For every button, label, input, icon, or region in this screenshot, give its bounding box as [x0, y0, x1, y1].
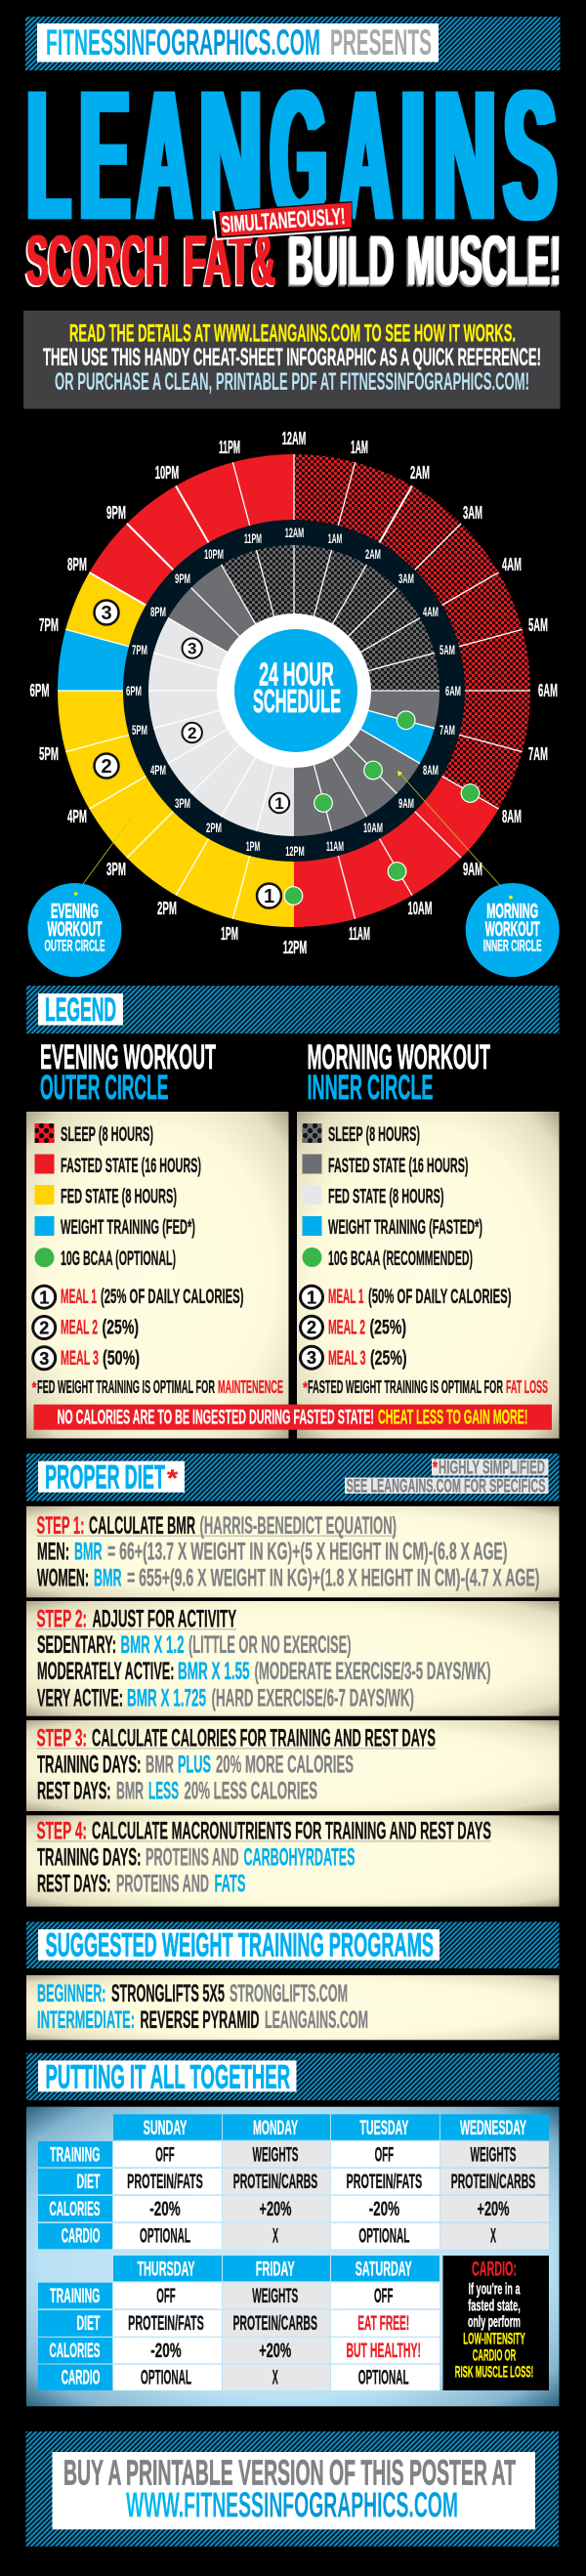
title: Leangains [27, 52, 557, 259]
table: sunday to wednesday: TRAINING [50, 2143, 100, 2166]
outer hour labels: 11AM [349, 924, 370, 944]
legend titles: OUTER CIRCLE [40, 1069, 168, 1107]
meal markers [94, 600, 289, 908]
outer hour labels: 12AM [282, 429, 306, 448]
inner hour labels: 4AM [423, 604, 439, 619]
panel: evening legend: (25%) [102, 1315, 139, 1338]
panel: step 2: MODERATELY ACTIVE: [37, 1658, 174, 1685]
callout: cardio warning: CARDIO OR [473, 2345, 516, 2364]
panel: step 1: MEN: [37, 1539, 69, 1566]
panel: step 3: STEP 3: [37, 1724, 87, 1752]
table: thursday to saturday: DIET [76, 2312, 101, 2335]
table: sunday to wednesday: PROTEIN/CARBS [233, 2171, 317, 2193]
panel: programs [26, 1975, 559, 2040]
outer hour labels: 6PM [29, 681, 49, 700]
table: sunday to wednesday: WEIGHTS [471, 2143, 516, 2166]
table: thursday to saturday: BUT HEALTHY! [346, 2340, 421, 2362]
inner hour labels: 10PM [204, 546, 224, 562]
outer hour labels: 4PM [67, 807, 87, 826]
inner hour labels: 1AM [328, 530, 342, 546]
panel: step 2: STEP 2: [37, 1605, 87, 1632]
outer hour labels: 8AM [502, 807, 522, 826]
panel: morning legend: (25%) [370, 1346, 406, 1370]
inner hour labels: 4PM [150, 762, 166, 778]
panel: morning legend: 2 [307, 1318, 316, 1337]
panel: step 3: BMR [146, 1751, 174, 1778]
callout: cardio warning: fasted state, [468, 2297, 521, 2315]
inner hour labels: 10AM [363, 820, 383, 835]
panel: step 1: BMR [74, 1539, 102, 1566]
table: thursday to saturday: OPTIONAL [358, 2366, 409, 2388]
panel: evening legend: MEAL 3 [61, 1346, 99, 1370]
table: thursday to saturday: SATURDAY [356, 2258, 412, 2280]
panel: evening legend: 3 [39, 1349, 49, 1369]
center badge: 24 hour schedule [217, 613, 371, 768]
table: sunday to wednesday: +20% [260, 2198, 292, 2220]
table: thursday to saturday: EAT FREE! [357, 2312, 409, 2335]
inner ring: morning workout [148, 545, 440, 836]
inner hour labels: 12PM [285, 843, 305, 859]
table: sunday to wednesday: -20% [369, 2198, 399, 2220]
panel: evening legend: 1 [39, 1288, 49, 1307]
table: sunday to wednesday: -20% [149, 2198, 181, 2220]
panel: step 3: REST DAYS: [37, 1778, 111, 1805]
outer hour labels: 9PM [106, 503, 126, 523]
inner hour labels: 5AM [440, 642, 455, 657]
title: Leangains: G [271, 52, 327, 259]
heading: putting it all together [26, 2053, 559, 2100]
panel: morning legend: 3 [307, 1348, 316, 1368]
callout: evening workout: WORKOUT [47, 918, 103, 941]
callout: cardio warning: If you're in a [469, 2280, 521, 2299]
table: thursday to saturday: X [272, 2366, 278, 2388]
subtitle: scorch fat and build muscle: SCORCH [25, 225, 168, 303]
panel: step 2 [26, 1601, 559, 1716]
panel: morning legend: SLEEP (8 HOURS) [328, 1122, 420, 1146]
panel: programs: BEGINNER: [37, 1980, 105, 2007]
dark ring [122, 519, 466, 863]
table: thursday to saturday: FRIDAY [256, 2258, 295, 2280]
outer hour labels: 9AM [463, 860, 482, 879]
subtitle: scorch fat and build muscle: FAT [182, 225, 251, 303]
inner hour labels: 11AM [326, 838, 344, 854]
table: sunday to wednesday [38, 2114, 549, 2249]
panel: evening legend: * [31, 1378, 37, 1397]
panel: step 1: CALCULATE BMR [89, 1512, 195, 1540]
table: sunday to wednesday: CALORIES [49, 2198, 100, 2220]
center badge: 24 hour schedule: 24 HOUR [259, 656, 334, 692]
title: Leangains: A [339, 52, 392, 259]
outer hour labels: 2PM [157, 899, 177, 918]
panel: evening legend: FED WEIGHT TRAINING IS OPTIMAL FOR [37, 1377, 215, 1397]
panel: programs: LEANGAINS.COM [265, 2006, 368, 2034]
panel: step 4: PROTEINS AND [116, 1871, 209, 1898]
subtitle: scorch fat and build muscle [25, 223, 562, 303]
outer hour labels: 4AM [502, 555, 522, 574]
panel: programs: STRONGLIFTS 5X5 [111, 1980, 225, 2007]
inner hour labels: 3PM [175, 795, 190, 811]
heading: proper diet: * [433, 1457, 438, 1477]
legend titles: INNER CIRCLE [307, 1069, 434, 1107]
outer hour labels: 7AM [528, 744, 548, 764]
panel: evening legend: FASTED STATE (16 HOURS) [61, 1154, 201, 1177]
inner hour labels: 6AM [445, 683, 461, 698]
panel: morning legend: MEAL 1 [328, 1285, 364, 1308]
table: sunday to wednesday: MONDAY [253, 2117, 298, 2139]
arrow: morning callout [398, 771, 513, 899]
panel: step 1: STEP 1: [37, 1512, 84, 1540]
table: thursday to saturday: -20% [150, 2340, 182, 2362]
intro box [23, 311, 561, 408]
inner hour labels: 1PM [246, 838, 260, 854]
panel: step 3: TRAINING DAYS: [37, 1751, 141, 1778]
panel: step 2: SEDENTARY: [37, 1631, 116, 1659]
outer hour labels: 1AM [351, 438, 368, 457]
table: thursday to saturday: PROTEIN/CARBS [232, 2312, 317, 2335]
panel: step 1: WOMEN: [37, 1565, 89, 1592]
arrow: evening callout [74, 819, 131, 896]
subtitle: scorch fat and build muscle: FAT [184, 223, 252, 301]
badge: simultaneously [213, 201, 353, 240]
panel: step 3: 20% MORE CALORIES [216, 1751, 354, 1778]
table: sunday to wednesday: X [272, 2224, 278, 2247]
panel: step 2: BMR X 1.2 [121, 1631, 184, 1659]
panel: evening legend: MEAL 2 [61, 1315, 98, 1338]
footer call to action [25, 2431, 559, 2547]
table: thursday to saturday: TRAINING [50, 2285, 100, 2307]
inner hour labels: 2AM [365, 546, 381, 562]
table: thursday to saturday: THURSDAY [137, 2258, 195, 2280]
table: thursday to saturday [38, 2256, 440, 2390]
title: Leangains: I [400, 52, 426, 259]
inner hour labels: 2PM [206, 820, 222, 835]
panel: step 1: (HARRIS-BENEDICT EQUATION) [199, 1512, 397, 1540]
panel: morning legend: MEAL 2 [328, 1315, 365, 1338]
panel: step 4: REST DAYS: [37, 1871, 111, 1898]
outer hour labels: 11PM [219, 438, 240, 457]
table: sunday to wednesday: OPTIONAL [358, 2224, 409, 2247]
table: thursday to saturday: OFF [156, 2285, 176, 2307]
outer hour labels: 10AM [408, 899, 432, 918]
outer hour labels: 1PM [221, 924, 238, 944]
panel: morning legend: 1 [307, 1288, 316, 1307]
panel: step 3: 20% LESS CALORIES [184, 1778, 317, 1805]
panel: step 4: STEP 4: [37, 1817, 87, 1844]
outer hour labels: 8PM [67, 555, 87, 574]
meal markers: 3 [101, 603, 112, 624]
meal markers: 3 [188, 640, 196, 658]
panel: programs: REVERSE PYRAMID [141, 2006, 260, 2034]
panel: step 4: TRAINING DAYS: [37, 1844, 141, 1872]
panel: evening legend: SLEEP (8 HOURS) [61, 1122, 153, 1146]
callout: cardio warning: only perform [468, 2312, 521, 2331]
outer hour labels: 6AM [538, 681, 558, 700]
table: thursday to saturday: OPTIONAL [141, 2366, 191, 2388]
heading: proper diet [26, 1454, 559, 1500]
inner hour labels: 9AM [398, 795, 414, 811]
subtitle: scorch fat and build muscle: SCORCH [26, 223, 169, 301]
table: sunday to wednesday: SUNDAY [144, 2117, 187, 2139]
table: thursday to saturday: WEIGHTS [252, 2285, 298, 2307]
outer ring: evening workout [58, 454, 530, 927]
legend titles: EVENING WORKOUT [40, 1038, 216, 1077]
panel: evening legend: 2 [39, 1319, 49, 1338]
panel: step 2: (LITTLE OR NO EXERCISE) [188, 1631, 352, 1659]
table: sunday to wednesday: OFF [375, 2143, 394, 2166]
inner hour labels: 8PM [150, 604, 166, 619]
heading: proper diet: PROPER DIET [45, 1459, 165, 1497]
outer hour labels: 3AM [463, 503, 482, 523]
panel: step 2: BMR X 1.55 [178, 1658, 250, 1685]
table: sunday to wednesday: WEIGHTS [252, 2143, 299, 2166]
subtitle: scorch fat and build muscle: BUILD [287, 225, 393, 303]
heading: proper diet: * [167, 1465, 179, 1492]
title: Leangains: N [434, 52, 496, 259]
meal markers: 1 [264, 886, 274, 908]
panel: step 2: VERY ACTIVE: [37, 1685, 123, 1712]
panel: step 1 [26, 1506, 559, 1597]
table: thursday to saturday: CALORIES [49, 2340, 100, 2362]
panel: step 2: (HARD EXERCISE/6-7 DAYS/WK) [211, 1685, 414, 1712]
panel: step 3: BMR [116, 1778, 144, 1805]
title: Leangains: E [80, 52, 130, 259]
table: sunday to wednesday: +20% [477, 2198, 510, 2220]
outer hour labels [29, 429, 558, 957]
subtitle: scorch fat and build muscle: & [252, 223, 275, 301]
panel: evening legend: (50%) [103, 1346, 140, 1370]
panel: step 4 [26, 1815, 559, 1907]
panel: step 1: BMR [94, 1565, 121, 1592]
heading: legend [26, 986, 559, 1034]
inner hour labels: 9PM [175, 570, 190, 586]
panel: weekly table [26, 2107, 559, 2406]
table: thursday to saturday: OFF [374, 2285, 394, 2307]
outer hour labels: 2AM [410, 463, 430, 483]
panel: step 4: FATS [215, 1871, 246, 1898]
outer hour labels: 10PM [155, 463, 179, 483]
panel: evening legend: 10G BCAA (OPTIONAL) [61, 1246, 176, 1270]
panel: evening legend: (25% OF DAILY CALORIES) [101, 1285, 244, 1308]
table: sunday to wednesday: PROTEIN/FATS [127, 2171, 203, 2193]
inner hour labels: 5PM [132, 722, 147, 738]
outer hour labels: 12PM [283, 938, 307, 957]
title: Leangains: A [138, 52, 191, 259]
panel: morning legend [297, 1112, 559, 1438]
panel: step 3: LESS [148, 1778, 179, 1805]
panel: step 2: BMR X 1.725 [127, 1685, 206, 1712]
inner hour labels: 3AM [398, 570, 414, 586]
table: thursday to saturday: CARDIO [62, 2366, 100, 2388]
title: Leangains: N [199, 52, 262, 259]
outer hour labels: 5AM [528, 615, 548, 635]
callout: morning workout [466, 883, 560, 977]
inner hour labels: 12AM [285, 525, 304, 540]
inner hour labels: 7PM [132, 642, 147, 657]
panel: evening legend: WEIGHT TRAINING (FED*) [61, 1215, 195, 1239]
outer hour labels: 3PM [106, 860, 126, 879]
table: sunday to wednesday: OPTIONAL [140, 2224, 190, 2247]
BCAA dots [284, 711, 480, 905]
heading: legend: LEGEND [45, 992, 116, 1029]
header banner: FITNESSINFOGRAPHICS.COM [46, 22, 320, 63]
chart: 24 hour schedule clock [27, 429, 560, 977]
subtitle: scorch fat and build muscle: & [250, 225, 273, 303]
meal markers: 2 [188, 724, 196, 742]
table: sunday to wednesday: DIET [76, 2171, 101, 2193]
panel: evening legend: FED STATE (8 HOURS) [61, 1184, 177, 1207]
center badge: 24 hour schedule: SCHEDULE [253, 683, 341, 719]
panel: morning legend: MEAL 3 [328, 1346, 366, 1370]
inner hour labels: 8AM [423, 762, 439, 778]
title: Leangains: L [27, 52, 70, 259]
panel: evening legend: MEAL 1 [61, 1285, 97, 1308]
panel: step 4: PROTEINS AND [146, 1844, 238, 1872]
table: sunday to wednesday: CARDIO [62, 2224, 100, 2247]
header banner: PRESENTS [330, 22, 432, 63]
heading: putting it all together: PUTTING IT ALL TOGETHER [45, 2058, 290, 2095]
badge: simultaneously: SIMULTANEOUSLY! [221, 203, 346, 237]
table: sunday to wednesday: X [490, 2224, 496, 2247]
table: thursday to saturday: PROTEIN/FATS [128, 2312, 204, 2335]
table: sunday to wednesday: PROTEIN/FATS [347, 2171, 422, 2193]
callout: evening workout: OUTER CIRCLE [45, 936, 105, 955]
panel: step 3 [26, 1720, 559, 1811]
panel: step 4: CARBOHYRDATES [244, 1844, 356, 1872]
meal markers: 2 [101, 756, 112, 778]
callout: evening workout [27, 883, 121, 977]
panel: programs: STRONGLIFTS.COM [230, 1980, 348, 2007]
table: sunday to wednesday: TUESDAY [359, 2117, 408, 2139]
meal markers: 1 [274, 794, 284, 813]
inner hour labels: 6PM [126, 683, 142, 698]
callout: cardio warning [443, 2256, 549, 2390]
outer hour labels: 5PM [39, 744, 59, 764]
panel: morning legend: FED STATE (8 HOURS) [328, 1184, 443, 1207]
callout: evening workout: EVENING [51, 901, 99, 922]
legend titles [40, 1038, 490, 1107]
panel: evening legend: MAINTENENCE [218, 1377, 283, 1397]
subtitle: scorch fat and build muscle: BUILD [288, 223, 395, 301]
callout: cardio warning: CARDIO: [472, 2258, 517, 2280]
table: sunday to wednesday: OFF [155, 2143, 175, 2166]
inner hour labels: 7AM [440, 722, 455, 738]
inner hour labels: 11PM [244, 530, 262, 546]
panel: morning legend: (25%) [369, 1315, 406, 1338]
panel: step 2: ADJUST FOR ACTIVITY [92, 1605, 236, 1632]
table: thursday to saturday: +20% [259, 2340, 291, 2362]
panel: programs: INTERMEDIATE: [37, 2006, 135, 2034]
inner hour labels [126, 525, 461, 859]
outer hour labels: 7PM [39, 615, 59, 635]
callout: morning workout: MORNING [486, 901, 538, 922]
panel: step 3: PLUS [178, 1751, 211, 1778]
panel: evening legend [26, 1112, 289, 1438]
panel: morning legend: * [303, 1378, 308, 1397]
